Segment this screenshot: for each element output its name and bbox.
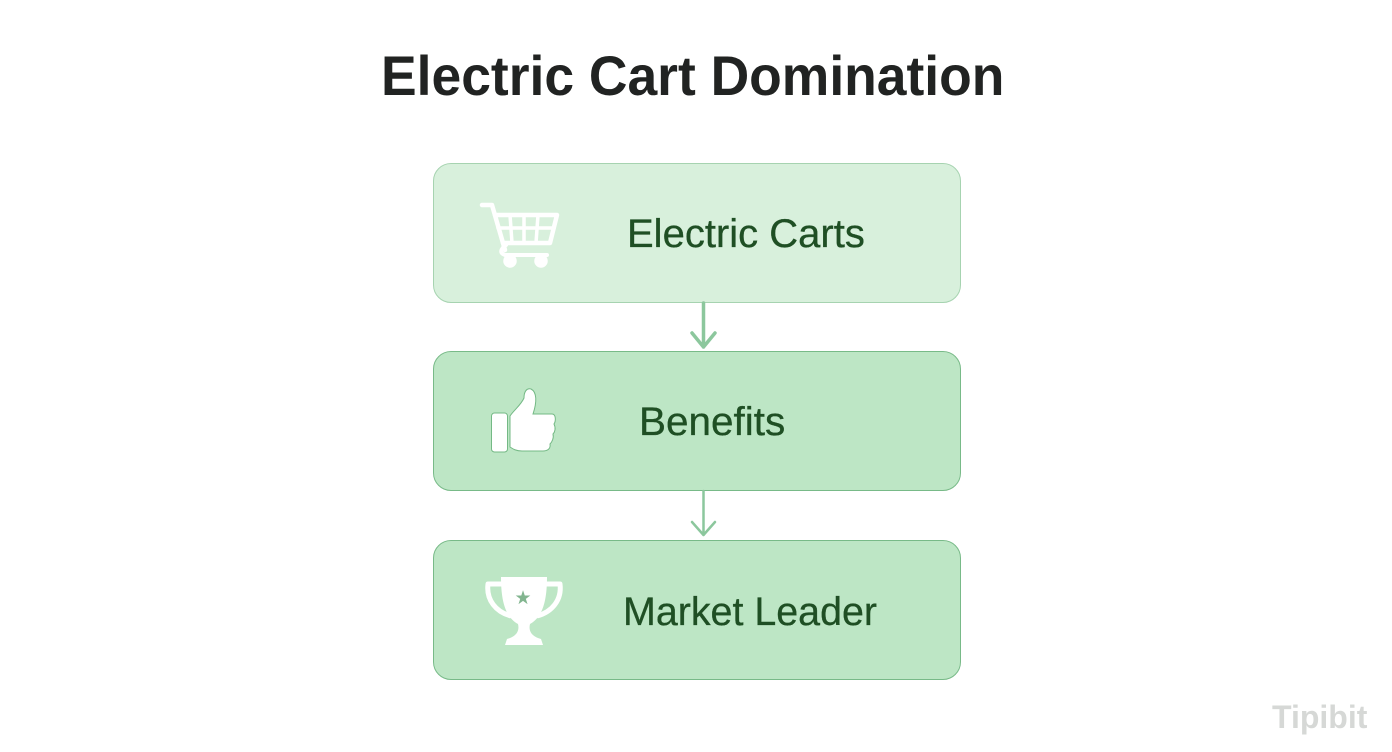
icon: trophy: ★ bbox=[514, 587, 532, 609]
title: Electric Cart Domination bbox=[381, 44, 1004, 106]
icon: shopping cart bbox=[480, 202, 560, 268]
panel: benefits bbox=[432, 351, 960, 491]
arrow: carts to benefits bbox=[690, 301, 717, 349]
panel: electric carts bbox=[432, 163, 960, 303]
label: electric carts: Electric Carts bbox=[627, 212, 865, 256]
icon: trophy bbox=[485, 577, 563, 645]
watermark: Tipibit bbox=[1272, 699, 1367, 735]
panel: market leader bbox=[432, 540, 960, 680]
label: benefits: Benefits bbox=[639, 400, 785, 444]
arrow: benefits to market leader bbox=[690, 490, 716, 536]
label: market leader: Market Leader bbox=[623, 590, 877, 634]
icon: thumbs up bbox=[491, 388, 556, 452]
